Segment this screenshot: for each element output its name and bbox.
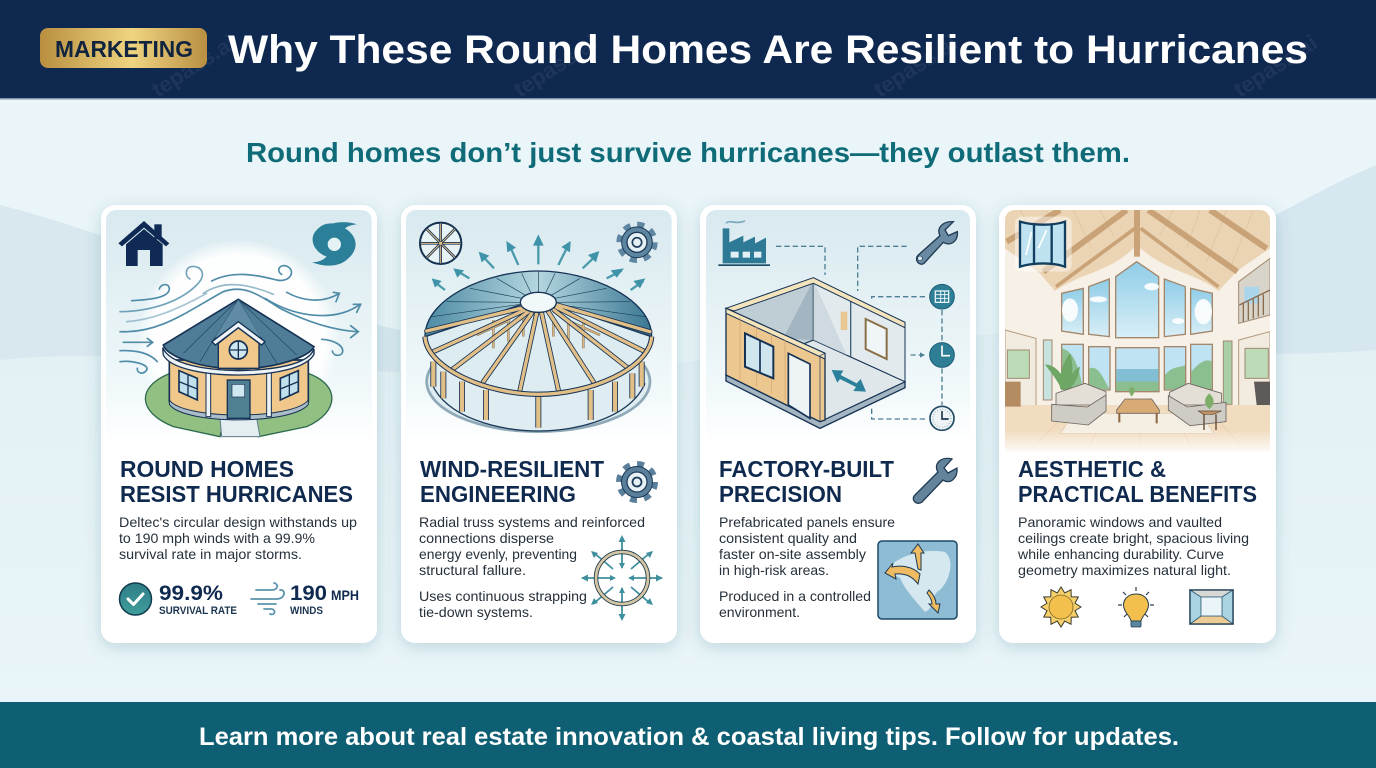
icon: clock dial bbox=[930, 343, 954, 367]
body text: connections disperse bbox=[419, 530, 554, 546]
icon: wheel bbox=[420, 223, 461, 264]
icon: force ring bbox=[581, 535, 663, 621]
illustration: radial truss roof bbox=[406, 210, 672, 445]
body text: environment. bbox=[719, 604, 800, 620]
header bar: tepass.ai bbox=[1229, 30, 1322, 102]
rim ring bbox=[425, 337, 652, 394]
heading bbox=[1018, 456, 1257, 507]
body text: survival rate in major storms. bbox=[119, 546, 302, 562]
stat: survival rate: SURVIVAL RATE bbox=[159, 605, 237, 617]
icon: distribution map bbox=[878, 541, 957, 619]
tagline: Round homes don’t just survive hurricanes—they outlast them. bbox=[246, 137, 1130, 168]
front panel bbox=[726, 308, 825, 422]
panel: aesthetic and practical benefits bbox=[999, 205, 1277, 643]
icon: checklist bbox=[930, 284, 954, 309]
body text: to 190 mph winds with a 99.9% bbox=[119, 530, 315, 546]
title: Why These Round Homes Are Resilient to Hurricanes bbox=[228, 28, 1308, 72]
header bar: tepass.ai bbox=[147, 30, 240, 102]
side walls and upper gallery bbox=[1005, 330, 1036, 408]
icon: factory bbox=[718, 221, 770, 266]
icon: wrench small bbox=[913, 458, 957, 503]
icon: stopwatch bbox=[930, 406, 954, 430]
icon: hurricane bbox=[312, 222, 357, 266]
heading: FACTORY-BUILT bbox=[719, 456, 894, 482]
illustration: prefabricated room bbox=[706, 210, 970, 445]
illustration: round house in wind bbox=[106, 210, 372, 445]
upper windows bbox=[1062, 262, 1212, 338]
floor and rug bbox=[1005, 405, 1270, 452]
heading: WIND-RESILIENT bbox=[420, 456, 604, 482]
stat: survival rate: 99.9% bbox=[159, 582, 223, 605]
header bar: tepass.ai bbox=[869, 30, 962, 102]
heading: ENGINEERING bbox=[420, 481, 576, 507]
category badge bbox=[40, 28, 207, 68]
dashed connectors bbox=[776, 246, 942, 419]
energy arrows bbox=[435, 239, 643, 290]
header bar bbox=[0, 0, 1376, 102]
sofas and coffee table bbox=[1052, 383, 1226, 426]
heading bbox=[120, 456, 353, 507]
heading: ROUND HOMES bbox=[120, 456, 294, 482]
radial rafters bbox=[427, 305, 650, 390]
panel: factory-built precision bbox=[700, 205, 976, 643]
body text: Produced in a controlled bbox=[719, 588, 871, 604]
lower windows with sea view bbox=[1062, 344, 1212, 392]
icon: wrench bbox=[917, 222, 957, 264]
vaulted ceiling bbox=[1005, 210, 1270, 291]
page background bbox=[0, 99, 1376, 702]
illustration: vaulted living room bbox=[1000, 210, 1277, 455]
body text: faster on-site assembly bbox=[719, 546, 866, 562]
roof skin bbox=[425, 271, 652, 395]
wall posts bbox=[433, 362, 642, 428]
dormer bbox=[218, 328, 259, 368]
body text: Radial truss systems and reinforced bbox=[419, 514, 645, 530]
heading: AESTHETIC & bbox=[1018, 456, 1166, 482]
house body bbox=[169, 360, 308, 417]
icon: light bulb bbox=[1118, 587, 1154, 627]
header bar: tepass.ai bbox=[509, 30, 602, 102]
body text: in high-risk areas. bbox=[719, 562, 829, 578]
plant bbox=[1045, 353, 1080, 392]
wind streams bbox=[120, 266, 361, 373]
icon: curved window bbox=[1015, 217, 1072, 272]
lawn bbox=[145, 373, 332, 437]
stat: wind speed bbox=[251, 582, 359, 617]
footer banner bbox=[0, 702, 1376, 768]
double arrow bbox=[832, 370, 866, 392]
stat: wind speed: WINDS bbox=[290, 605, 323, 617]
icon: skylight window bbox=[1190, 590, 1233, 624]
roof bbox=[163, 299, 314, 369]
body text: tie-down systems. bbox=[419, 604, 533, 620]
body text bbox=[419, 514, 645, 620]
heading: PRACTICAL BENEFITS bbox=[1018, 481, 1257, 507]
body text: Deltec's circular design withstands up bbox=[119, 514, 357, 530]
body text: while enhancing durability. Curve bbox=[1017, 546, 1224, 562]
body text: Prefabricated panels ensure bbox=[719, 514, 895, 530]
heading: PRECISION bbox=[719, 481, 842, 507]
room walls and floor bbox=[726, 375, 905, 428]
stat: survival rate bbox=[120, 582, 237, 617]
stat: wind speed: 190 bbox=[290, 582, 327, 605]
heading bbox=[420, 456, 604, 507]
body text: consistent quality and bbox=[719, 530, 857, 546]
footer call to action: Learn more about real estate innovation & coastal living tips. Follow for updates. bbox=[199, 723, 1179, 751]
dining set bbox=[1005, 382, 1021, 407]
body text bbox=[1017, 514, 1249, 578]
base ring bbox=[427, 332, 650, 432]
body text bbox=[119, 514, 357, 562]
body text bbox=[719, 514, 895, 620]
body text: Panoramic windows and vaulted bbox=[1018, 514, 1222, 530]
body text: Uses continuous strapping bbox=[419, 588, 587, 604]
icon: house bbox=[118, 221, 169, 266]
body text: geometry maximizes natural light. bbox=[1018, 562, 1231, 578]
icon: gear small bbox=[620, 465, 654, 499]
stat: wind speed: MPH bbox=[331, 587, 359, 603]
panel: wind-resilient engineering bbox=[401, 205, 677, 643]
heading bbox=[719, 456, 894, 507]
icon: sun bbox=[1041, 587, 1081, 627]
body text: ceilings create bright, spacious living bbox=[1018, 530, 1249, 546]
heading: RESIST HURRICANES bbox=[120, 481, 353, 507]
panel: round homes resist hurricanes bbox=[101, 205, 377, 643]
secondary bracing bbox=[477, 318, 600, 348]
body text: energy evenly, preventing bbox=[419, 546, 577, 562]
body text: structural fallure. bbox=[419, 562, 526, 578]
icon: gear bbox=[620, 226, 654, 259]
category badge: MARKETING bbox=[55, 36, 193, 62]
